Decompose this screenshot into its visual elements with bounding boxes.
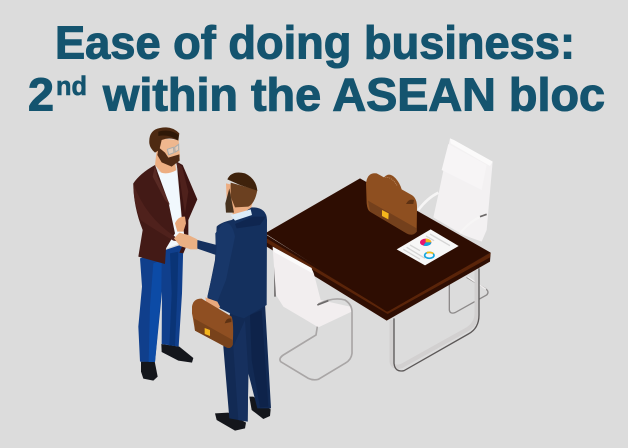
- title: 2: [28, 69, 54, 121]
- hair: [149, 127, 179, 153]
- upper hand: [175, 217, 186, 232]
- front chair: [273, 247, 352, 380]
- title: nd: [56, 71, 87, 101]
- businessman right, back view: [174, 172, 271, 431]
- back shoe: [161, 344, 193, 363]
- head: [159, 138, 180, 166]
- trousers: [223, 303, 271, 422]
- briefcase in hand: [192, 299, 233, 348]
- neck: [155, 150, 177, 175]
- jacket and arm: [197, 207, 267, 318]
- table top: [264, 178, 491, 321]
- trousers: [138, 244, 183, 362]
- front shoe: [215, 413, 246, 431]
- office scene: table and chairs: [264, 138, 493, 380]
- hand holding briefcase: [205, 297, 220, 312]
- title: within the ASEAN bloc: [102, 69, 605, 121]
- title: Ease of doing business:: [55, 17, 575, 69]
- front shoe: [141, 361, 158, 381]
- document with charts: [397, 229, 459, 265]
- rear shoe: [249, 397, 271, 419]
- beard: [157, 147, 180, 167]
- table legs: [275, 257, 479, 371]
- beard back view: [225, 188, 234, 213]
- title: [28, 17, 605, 121]
- white shirt: [156, 170, 185, 248]
- jacket: [133, 162, 197, 264]
- hair back view: [231, 183, 257, 207]
- back chair: [418, 138, 493, 313]
- glasses: [167, 144, 179, 155]
- briefcase on table: [366, 173, 417, 235]
- collar: [231, 209, 252, 221]
- handshake: [174, 233, 197, 249]
- businessman left, facing right: [133, 127, 197, 381]
- neck and face: [226, 183, 256, 215]
